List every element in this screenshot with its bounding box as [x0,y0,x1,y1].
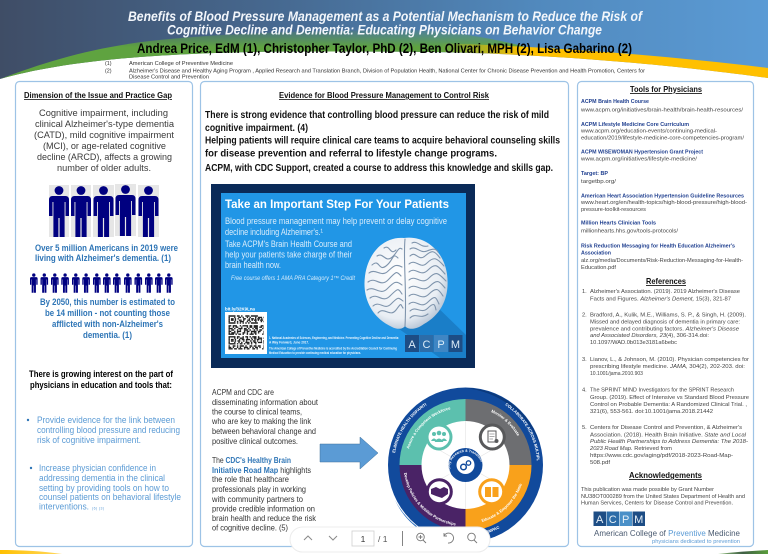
ad footnotes: A Way Forward, June 2017. [269,340,309,344]
text block: dissemination: disseminating information about [212,397,319,407]
icon: handshake [426,478,453,505]
tools list: American Heart Association Hypertension Guideline Resources [581,193,744,199]
text block: dissemination: the course to clinical teams, [212,406,302,416]
ACPM logo: C [609,514,617,526]
references list: and Associated Disorders, 23 (4), 306-314.doi: [590,333,709,339]
text block: acknowledgements [581,487,745,507]
ad ACPM logo: P [437,339,445,351]
bullet list: controlling blood pressure and reducing [37,425,180,435]
title: Benefits of Blood Pressure Management as a Potential Mechanism to Reduce the Risk of [128,8,643,24]
affiliations: (1) [105,61,112,67]
tools list [580,99,747,271]
ad copy: Take ACPM's Brain Health Course and [225,239,352,249]
quadrant: educate [466,465,532,531]
QR code [225,306,267,354]
text block: acknowledgements: Human Services, Centers for Disease Control and Prevention. [581,501,733,507]
ad footnotes [269,336,399,355]
text block: dissemination: between behavioral change and [212,426,316,436]
heading: evidence: Evidence for Blood Pressure Management to Control Risk [279,91,490,100]
ACPM logo: M [634,514,643,526]
road map wheel [388,388,543,538]
references list: 10.1001/jama.2010.903 [590,371,643,377]
text block: dissemination: brain health and reduce the risk [212,513,317,523]
ad headline: Take an Important Step For Your Patients [225,197,449,211]
header banner [0,0,768,79]
stat: 14 million: afflicted with non-Alzheimer's [52,319,163,329]
tools list: alz.org/media/Documents/Risk-Reduction-Messaging-for-Health- [581,258,743,264]
ACPM logo: P [622,514,629,526]
ad footnotes: Medical Education to provide continuing medical education for physicians. [269,351,361,355]
ad copy: Free course offers 1 AMA PRA Category 1™ Credit [231,275,355,282]
bottom swoosh left [0,550,62,554]
icon: fourteen small people [30,273,173,293]
QR code: bit.ly/32K9Lna [225,306,256,312]
references list: 10.1097/WAD.0b013e3181a6bebc [590,340,677,346]
text block: cognitive impairment: (MCI), or age-related cognitive [43,141,166,151]
text block: dissemination: the role that healthcare [212,474,289,484]
text block: acknowledgements: This publication was made possible by Grant Number [581,487,714,493]
stat: 5 million: living with Alzheimer's dementia. (1) [35,253,171,263]
references list: 2. [582,312,587,318]
stat: 14 million: be 14 million - not counting those [45,308,170,318]
text block: strong evidence: cognitive impairment. (4) [205,123,308,134]
tools list: targetbp.org/ [581,179,616,185]
references list: The SPRINT MIND Investigators for the SPRINT Research [590,388,734,394]
brain illustration [364,238,466,358]
text block: dissemination: The CDC's Healthy Brain [212,455,291,465]
affiliations: (2) [105,68,112,74]
text block: dissemination: with community partners to [211,494,303,504]
wheel labels: Assure a Competent Workforce [406,408,450,449]
ad ACPM logo: A [408,339,416,351]
affiliations: American College of Preventive Medicine [129,61,233,67]
toolbar icons [402,531,477,546]
ACPM logo: A [596,514,604,526]
text block: cognitive impairment: Cognitive impairment, including [39,108,168,118]
references list: Lianov, L., & Johnson, M. (2010). Physician competencies for [590,357,749,363]
references list: 5. [582,425,587,431]
PDF viewer toolbar [290,527,490,552]
text block: growing interest: physicians in education and tools that: [30,380,172,390]
text block: growing interest [29,369,174,390]
text block: cognitive impairment: number of older adults. [57,163,151,173]
text block: cognitive impairment: decline (ARCD), affects a growing [37,152,172,162]
references list: Control on Probable Dementia: A Randomized Clinical Trial. , [590,402,747,408]
heading: references: References [646,276,686,286]
references list: Association. (2018). Health Brain Initiative. State and Local [590,432,747,438]
arrow [320,437,378,469]
ACPM logo: American College of Preventive Medicine [594,529,741,538]
references list: https://www.cdc.gov/aging/pdf/2018-2023-Road-Map- [590,453,733,459]
quadrant: assure workforce [400,399,466,465]
ad ACPM logo: C [423,339,431,351]
tools list: pressure-toolkit-resources [581,207,646,213]
affiliations: Alzheimer's Disease and Healthy Aging Program , Applied Research and Translation Branch, Division of Population Health, National Center for Chronic Disease Prevention and Health Promotion, Centers for [129,68,645,74]
title: Cognitive Decline and Dementia: Educating Physicians on Behavior Change [167,22,602,38]
center hub [448,448,482,482]
ad copy: decline including Alzheimer's.¹ [225,227,323,237]
bullet list: risk of cognitive impairment. [37,435,141,445]
wheel labels: IMPACT [487,526,500,533]
title [128,8,643,38]
stat: 5 million: Over 5 million Americans in 2019 were [35,243,178,253]
panel: evidence [200,80,570,548]
references list: 2023 Road Map. Retrieved from [589,446,672,452]
tools list: www.acpm.org/initiatives/lifestyle-medicine/ [580,157,697,163]
text block: growing interest: There is growing interest on the part of [29,369,174,379]
tools list: Association [581,250,611,256]
references list: 508.pdf [590,460,610,466]
references list [582,289,749,466]
heading: acknowledgements: Acknowledgements [629,470,702,480]
ad copy [225,216,447,282]
tools list: millionhearts.hhs.gov/tools-protocols/ [581,229,678,235]
bottom swoosh right [718,550,768,554]
stat: 14 million [40,297,175,340]
icon: book [478,478,505,505]
references list: prescribing lifestyle medicine. JAMA, 304(2), 202-203. doi: [590,364,745,370]
heading: tools: Tools for Physicians [630,84,702,94]
text block: cognitive impairment: (CATD), mild cognitive impairment [34,130,174,140]
text block: dissemination: of cognitive decline. (5) [212,522,288,532]
text block: dissemination: provide credible information on [212,504,315,514]
bullet list: addressing dementia in the clinical [39,473,165,483]
text block: acknowledgements: NU38OT000289 from the United States Department of Health and [581,494,745,500]
references list: Missed and delayed diagnosis of dementia in primary care: [590,319,740,325]
tools list: Target: BP [581,171,608,177]
text block: cognitive impairment [34,108,175,173]
panel: dimension of the issue [16,82,192,546]
wheel labels: Educate & Empower the Nation [481,484,522,522]
tools list: Education.pdf [581,265,616,271]
references list: Bradford, A., Kulik, M.E., Williams, S. P., & Singh, H. (2009). [590,312,746,318]
stat: 5 million [35,243,178,263]
page number box [352,531,374,546]
text block: strong evidence: There is strong evidence that controlling blood pressure can reduce the risk of mild [205,110,549,121]
bullet list: Provide evidence for the link between [37,415,175,425]
text block: strong evidence: for disease prevention and referral to lifestyle change programs. [205,148,497,160]
heading: dimension: Dimension of the Issue and Practice Gap [24,91,172,100]
ad copy: brain health now. [225,260,281,270]
text block: cognitive impairment: clinical Alzheimer's-type dementia [35,119,175,129]
references list: Facts and Figures. Alzheimer's Dement, 15(3), 321-87 [590,296,731,302]
page count: / 1 [378,534,388,544]
tools list: Risk Reduction Messaging for Health Education Alzheimer's [581,243,735,249]
bullet list [27,415,181,512]
text block: strong evidence: Helping patients will require clinical care teams to acquire behavioral counseling skills [205,136,560,146]
panel: tools, references, acknowledgements [578,82,754,546]
tools list: ACPM Lifestyle Medicine Core Curriculum [581,122,689,128]
chevrons [304,536,337,540]
bullet list: setting by providing tools on how to [39,483,169,493]
ad ACPM logo [405,335,462,352]
references list: Alzheimer's Association. (2019). 2019 Alzheimer's Disease [590,289,740,295]
references list: 1. [582,289,587,295]
ad ACPM logo: M [451,339,460,351]
tools list: ACPM Brain Health Course [581,99,650,105]
text block: strong evidence [205,110,560,174]
text block: dissemination: who are key to making the link [211,416,312,426]
tools list: Million Hearts Clinician Tools [581,221,656,227]
references list: Centers for Disease Control and Prevention, & Alzheimer's [590,425,742,431]
bullet list: Increase physician confidence in [39,463,156,473]
references list: 321(6), 553-561. doi:10.1001/jama.2018.21442 [590,409,713,415]
references list: prevalence and contributing factors. Alzheimer's Disease [590,326,739,332]
affiliations: Disease Control and Prevention [129,74,209,80]
text block: dissemination: professionals play in working [212,484,306,494]
text block: dissemination: positive clinical outcomes. [212,436,298,446]
affiliations [105,61,645,80]
tools list: www.acpm.org/education-events/continuing-medical- [580,128,717,134]
references list: 4. [582,388,587,394]
tools list: ACPM WISEWOMAN Hypertension Grant Project [581,150,703,156]
text block: strong evidence: ACPM, with CDC Support, created a course to address this knowledge and skills gap. [205,163,553,174]
ad copy: help your patients take charge of their [225,250,352,260]
icon: clipboard [479,424,506,450]
page number box: 1 [361,534,366,544]
stat: 14 million: dementia. (1) [83,330,132,340]
ad footnotes: 1. National Academies of Sciences, Engineering, and Medicine. Preventing Cognitive Decline and Dementia: [269,336,399,340]
quadrant: develop policies [400,465,466,531]
quadrant: monitor and evaluate [466,399,532,465]
ad copy: Blood pressure management may help prevent or delay cognitive [225,216,447,226]
text block: dissemination [211,387,319,532]
tools list: education/2019/lifestyle-medicine-core-competencies-program/ [581,136,744,142]
ACPM logo: physicians dedicated to prevention [652,539,740,545]
tools list: www.acpm.org/initiatives/brain-health/brain-health-resources/ [580,108,743,114]
wheel labels: COLLABORATE ACROSS MULTIPLE SECTORS [506,403,540,461]
course advertisement [211,184,475,368]
wheel labels [392,403,540,533]
wheel labels: Employ Research & Translation [448,449,482,474]
references list: 3. [582,357,587,363]
ad footnotes: The American College of Preventive Medicine is accredited by the Accreditation Council for Continuing [269,346,397,350]
wheel labels: Develop Policies & Mobilize Partnerships [404,472,456,526]
stat: 14 million: By 2050, this number is estimated to [40,297,175,307]
tools list: www.heart.org/en/health-topics/high-blood-pressure/high-blood- [580,200,747,206]
references list: Public Health Partnerships to Address Dementia: The 2018- [590,439,748,445]
icon: five large people [49,184,159,237]
text block: dissemination: ACPM and CDC are [212,387,274,397]
wheel labels: ELIMINATE HEALTH DISPARITIES [392,403,426,453]
text block: dissemination: Initiative Road Map highlights [212,465,311,475]
references list: Group. (2019). Effect of Intensive vs Standard Blood Pressure [590,395,749,401]
wheel labels: Monitor & Evaluate [491,410,519,436]
icon: people [426,424,452,450]
authors: Andrea Price, EdM (1), Christopher Taylor, PhD (2), Ben Olivari, MPH (2), Lisa Gabarino (2) [137,41,632,56]
ACPM logo [594,512,741,545]
bullet list: interventions. [39,502,89,512]
bullet list: (6) (3) [92,506,104,510]
bullet list: counsel patients on behavioral lifestyle [39,492,181,502]
